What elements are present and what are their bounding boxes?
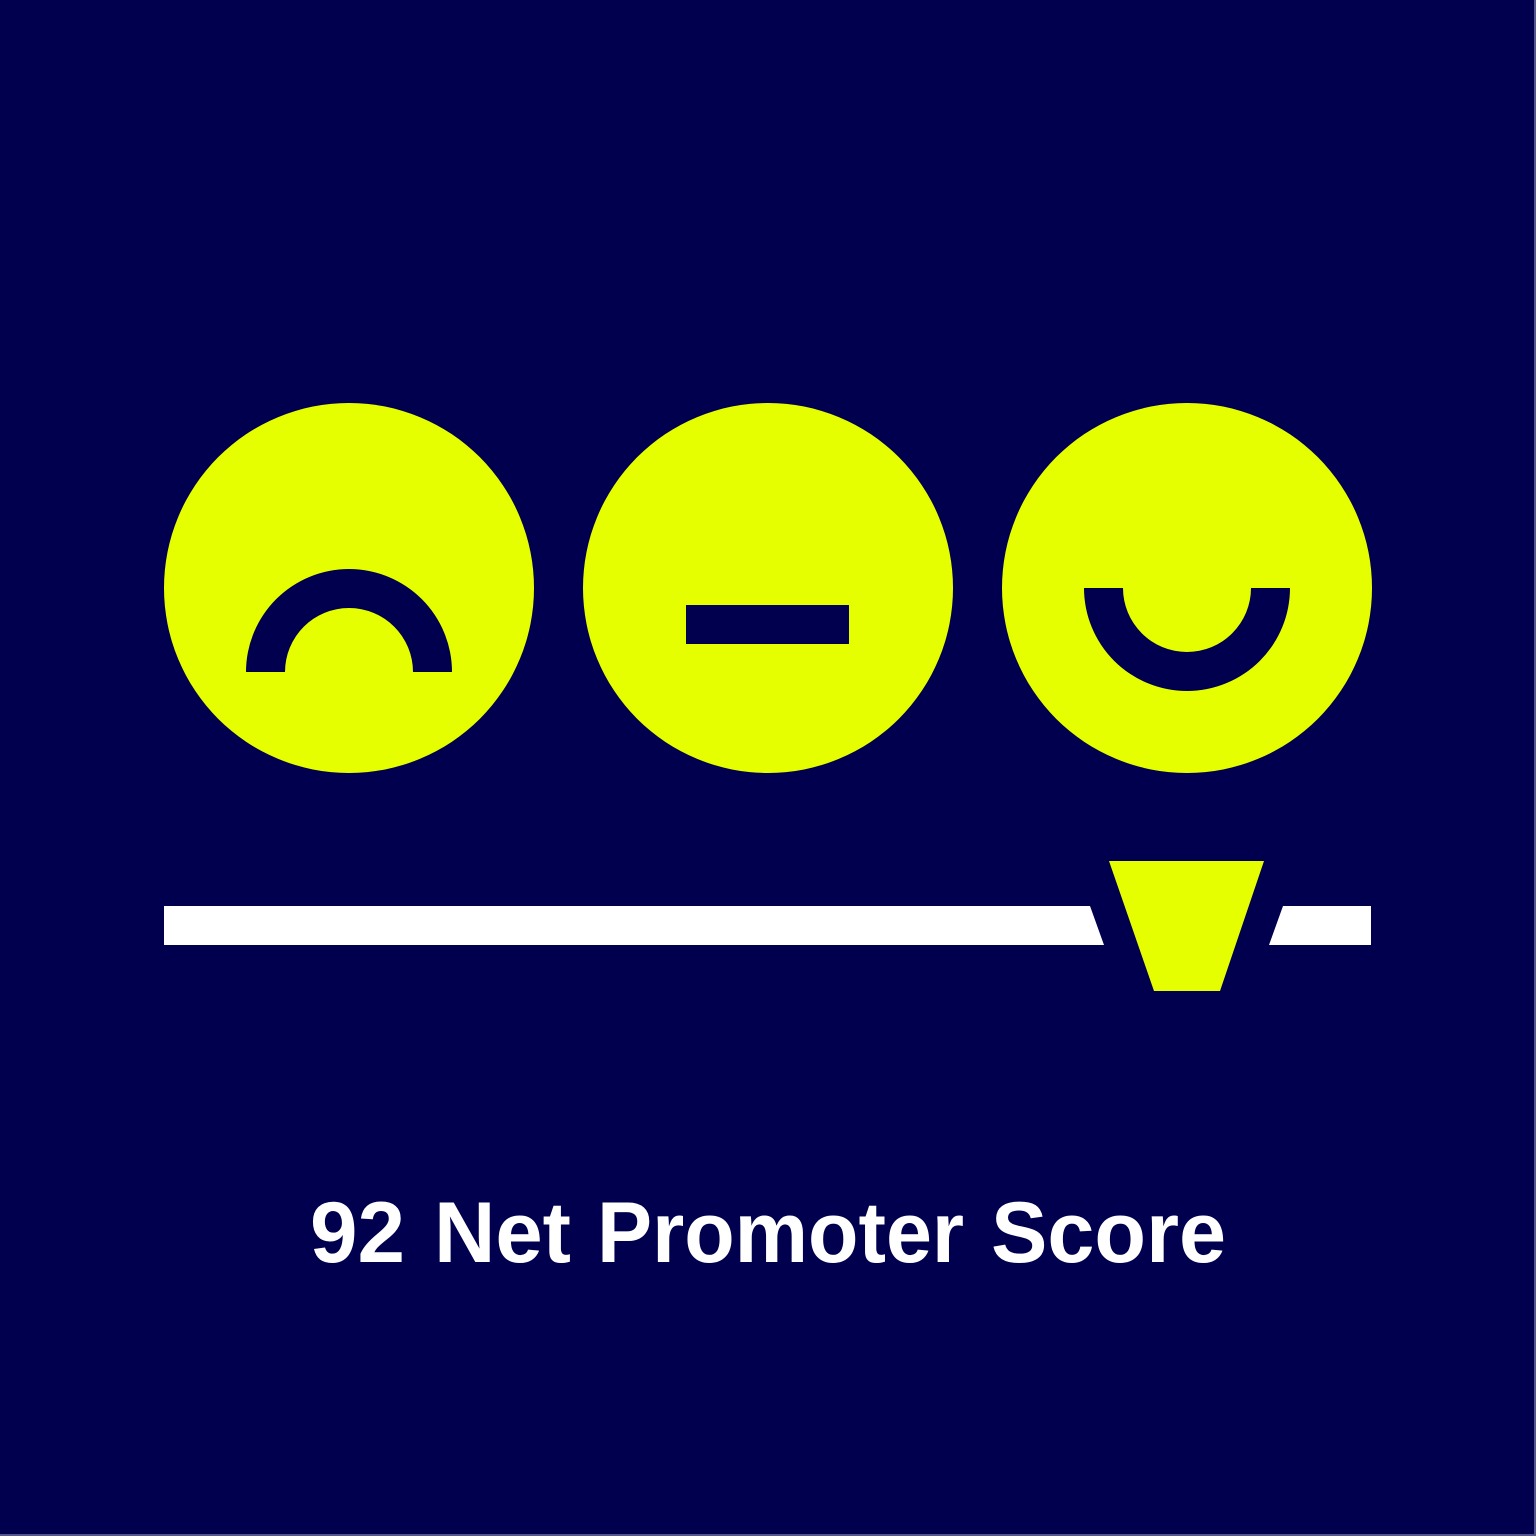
caption [310, 1185, 1226, 1281]
caption: Score [991, 1185, 1226, 1281]
caption: Promoter [597, 1185, 964, 1281]
icon: sad face [164, 403, 534, 773]
score marker [1109, 861, 1264, 991]
icon: neutral face [583, 403, 953, 773]
score scale bar [164, 906, 1371, 945]
caption: 92 [310, 1185, 405, 1281]
icon: happy face [1002, 403, 1372, 773]
caption: Net [434, 1185, 571, 1281]
